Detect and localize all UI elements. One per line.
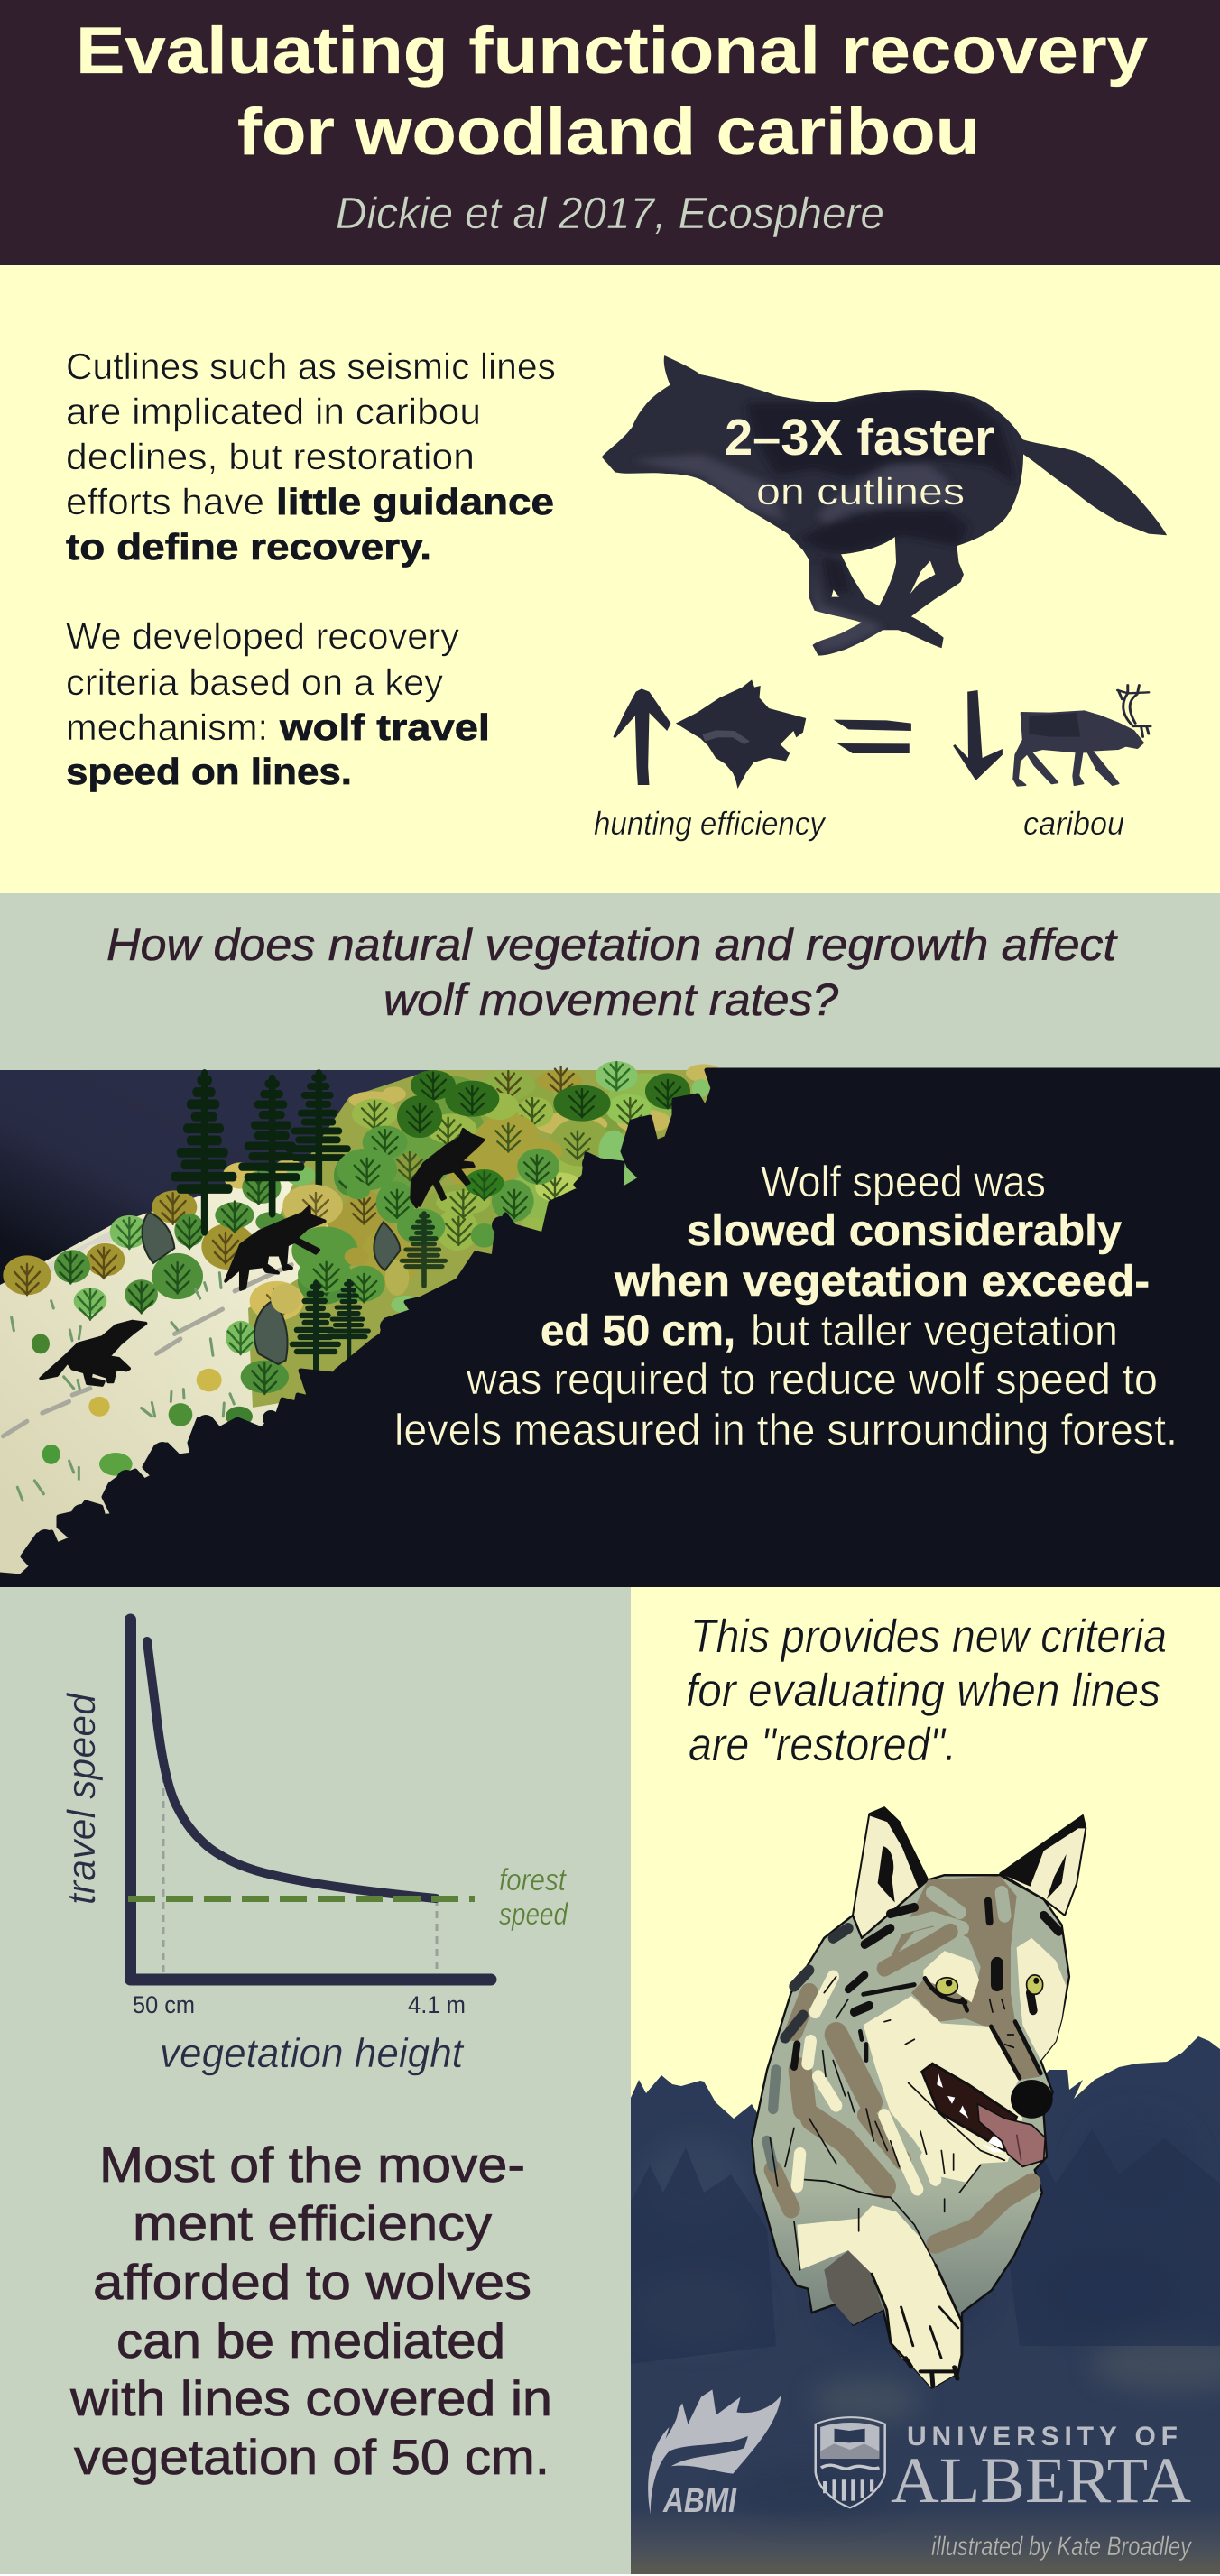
chart axes	[130, 1620, 491, 1980]
title: for woodland caribou	[237, 96, 980, 169]
text block: recovery criteria: speed on lines.	[66, 751, 352, 792]
icon: up arrow	[613, 688, 670, 785]
text block: new criteria: are "restored".	[689, 1719, 957, 1771]
axis label: vegetation height: vegetation height	[160, 2030, 465, 2076]
text block: new criteria	[686, 1611, 1167, 1771]
panel: restored criteria with wolf portrait	[631, 1587, 1220, 2574]
text block: wolf speed finding: slowed considerably	[687, 1207, 1122, 1255]
label: forest speed: forest	[499, 1863, 567, 1897]
wordmark: Alberta: ALBERTA	[891, 2444, 1191, 2516]
text block: wolf speed finding: was required to reduce wolf speed to	[466, 1356, 1158, 1404]
title	[76, 14, 1148, 169]
text block: wolf speed finding: when vegetation exceed-	[614, 1258, 1150, 1306]
icon: wolf head	[676, 679, 806, 789]
logo: University of Alberta	[816, 2417, 1191, 2516]
text block: conclusion	[69, 2137, 552, 2485]
eyes	[936, 1978, 957, 1995]
text block: recovery criteria: criteria based on a key	[66, 661, 443, 703]
forest silhouette edge	[0, 1070, 1220, 1587]
paw details	[872, 2265, 962, 2387]
speed curve	[147, 1641, 436, 1898]
icon: equation wolf and caribou	[594, 679, 1151, 842]
panel: chart and conclusion	[0, 1587, 631, 2574]
label: hunting efficiency: hunting efficiency	[594, 805, 827, 842]
ABMI wordmark: ABMI	[662, 2482, 737, 2520]
text block: new criteria: This provides new criteria	[690, 1611, 1167, 1663]
text block: conclusion: ment efficiency	[133, 2195, 493, 2251]
wolf in tall vegetation	[411, 1130, 484, 1207]
panel: question	[0, 893, 1220, 1070]
text block: cutlines intro: declines, but restoration	[66, 436, 475, 477]
track marks and grass	[3, 1232, 355, 1436]
land strip	[0, 1173, 469, 1587]
text block: recovery criteria: mechanism:	[66, 706, 268, 748]
text block: cutlines intro: to define recovery.	[66, 526, 431, 568]
text block: conclusion: Most of the move-	[99, 2137, 525, 2193]
wolf on open line	[41, 1322, 146, 1385]
shrubs left and trail	[3, 1156, 367, 1500]
face cream	[864, 1996, 1022, 2183]
text block: conclusion: with lines covered in	[69, 2370, 552, 2426]
tick label: 4.1 m: 4.1 m	[408, 1991, 466, 2018]
leg fur	[797, 2205, 962, 2388]
axis label: travel speed: travel speed	[60, 1693, 104, 1905]
text block: conclusion: afforded to wolves	[93, 2254, 531, 2310]
text block: conclusion: can be mediated	[116, 2313, 505, 2368]
wordmark: University of: UNIVERSITY OF	[907, 2422, 1178, 2451]
mouth	[922, 2064, 1017, 2151]
text block: recovery criteria	[66, 615, 490, 792]
text block: wolf speed finding: but taller vegetation	[751, 1307, 1118, 1355]
text block: cutlines intro: efforts have	[66, 481, 264, 522]
text block: conclusion: vegetation of 50 cm.	[74, 2429, 550, 2485]
illustration: forest backdrop	[631, 2036, 1220, 2574]
icon: down arrow	[953, 690, 1003, 780]
leaf shrubs	[143, 1212, 288, 1364]
right ear	[1000, 1815, 1086, 1916]
illustration: wolf portrait	[752, 1807, 1086, 2388]
text block: recovery criteria: We developed recovery	[66, 615, 460, 657]
text block: wolf speed finding: levels measured in the surrounding forest.	[394, 1407, 1178, 1454]
label: 2–3X faster: 2–3X faster	[725, 409, 994, 466]
text block: new criteria: for evaluating when lines	[686, 1665, 1160, 1717]
muzzle bridge	[991, 2022, 1040, 2080]
front trees	[292, 1214, 445, 1377]
text block: wolf speed finding	[394, 1159, 1178, 1454]
illustration: cutline scene	[0, 1061, 1220, 1587]
small shrubs	[32, 1334, 253, 1476]
citation: Dickie et al 2017, Ecosphere	[336, 189, 884, 238]
black markings	[770, 1901, 1058, 2270]
trees back	[174, 1073, 347, 1231]
wolf on trail	[226, 1207, 325, 1289]
text block: wolf speed finding: Wolf speed was	[761, 1159, 1046, 1206]
text block: cutlines intro: little guidance	[276, 481, 554, 522]
forest speed line	[128, 1896, 475, 1902]
title: Evaluating functional recovery	[76, 14, 1148, 88]
icon: running wolf silhouette with speed label	[601, 355, 1167, 656]
icon: caribou	[1014, 685, 1151, 786]
label: on cutlines: on cutlines	[756, 470, 965, 512]
nose	[1011, 2080, 1053, 2119]
shrubs on the upper slope	[271, 1061, 722, 1377]
fur bands	[767, 1893, 1047, 2244]
panel: header	[0, 0, 1220, 265]
text block: cutlines intro	[66, 346, 556, 568]
vegetation patch	[248, 1070, 713, 1408]
line chart: travel speed vs vegetation height	[60, 1620, 568, 2076]
brown forehead	[884, 1876, 1040, 2080]
heading: question	[106, 919, 1118, 1025]
text block: cutlines intro: Cutlines such as seismic lines	[66, 346, 556, 387]
crest	[816, 2417, 885, 2507]
label: caribou: caribou	[1023, 805, 1124, 842]
panel: introduction	[0, 265, 1220, 893]
text block: cutlines intro: are implicated in caribou	[66, 391, 481, 432]
label: forest speed	[499, 1863, 568, 1932]
logo: ABMI	[648, 2389, 781, 2520]
text block: wolf speed finding: ed 50 cm,	[541, 1307, 735, 1355]
icon: equals sign	[834, 720, 911, 753]
heading: question: How does natural vegetation and regrowth affect	[106, 919, 1118, 970]
label: forest speed: speed	[499, 1897, 568, 1932]
body and head base	[752, 1875, 1069, 2388]
text block: recovery criteria: wolf travel	[279, 706, 490, 748]
tongue	[977, 2104, 1045, 2166]
tick label: 50 cm: 50 cm	[133, 1991, 195, 2018]
left ear	[853, 1807, 928, 1938]
panel: wolf speed on vegetated lines	[0, 1061, 1220, 1587]
heading: question: wolf movement rates?	[384, 974, 838, 1025]
